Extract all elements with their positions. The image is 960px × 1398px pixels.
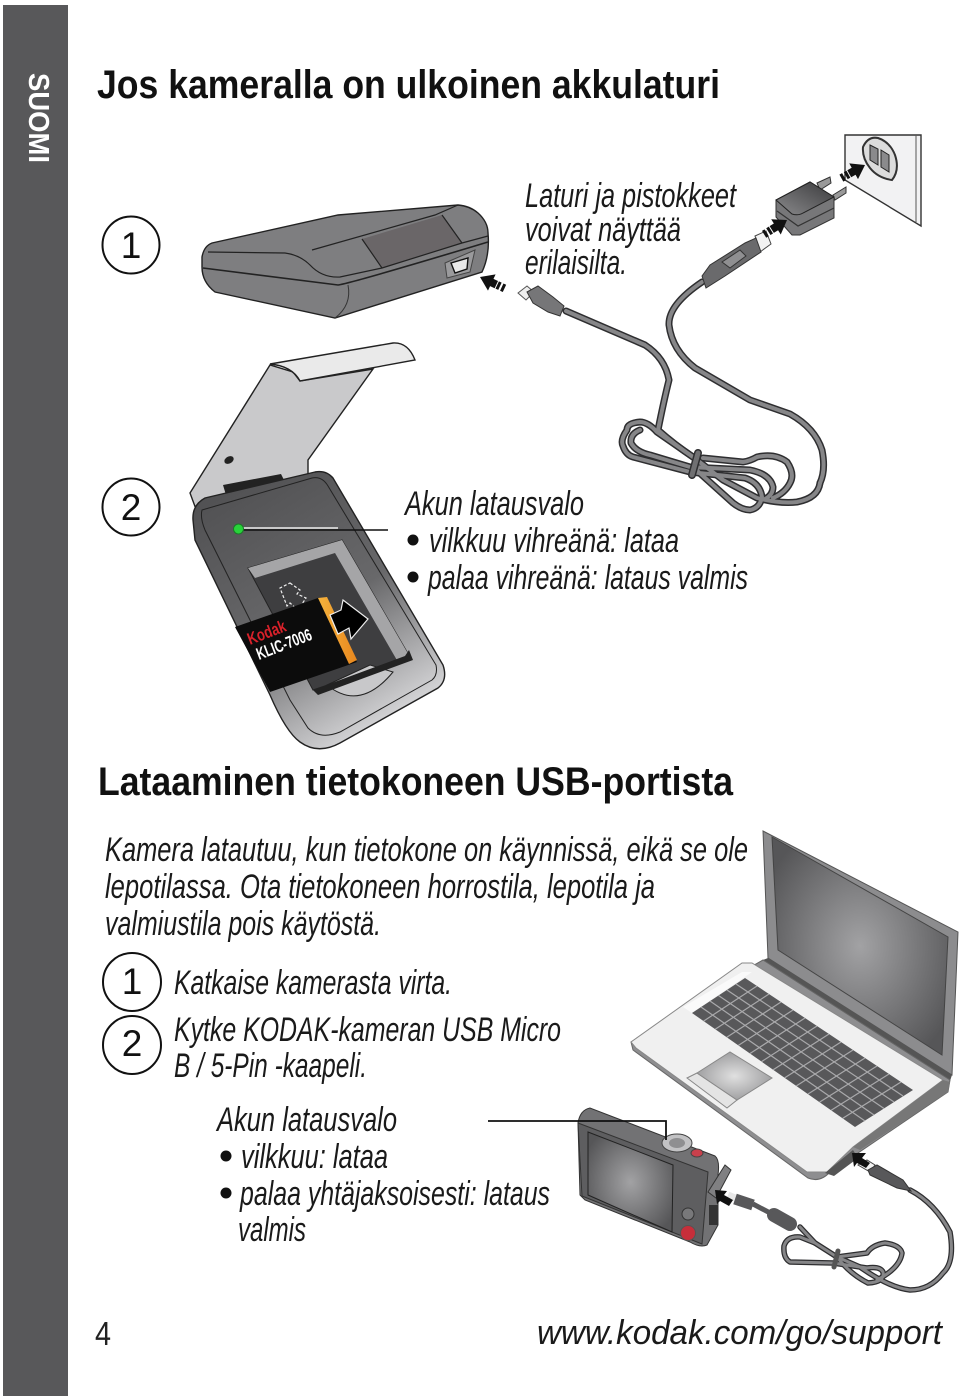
text: charger light states (404, 485, 748, 597)
text: camera light states (216, 1101, 550, 1249)
step number 1 (102, 216, 160, 274)
text: chargers may look different: Laturi ja pistokkeet (525, 177, 737, 215)
step 2: connect USB cable: Kytke KODAK-kameran USB Micro (174, 1011, 561, 1049)
step 2: connect USB cable (103, 1011, 561, 1085)
heading: external charger: Jos kameralla on ulkoinen akkulaturi (97, 63, 720, 107)
step 1: turn camera off: 1 (122, 961, 142, 1002)
illustration: charger cables and coil (566, 282, 824, 510)
illustration: charger open with battery (190, 343, 445, 749)
text: charger light states: palaa vihreänä: lataus valmis (427, 559, 748, 597)
text: USB charging intro: lepotilassa. Ota tietokoneen horrostila, lepotila ja (105, 868, 655, 906)
sidebar: language tab (3, 5, 68, 1396)
page number: 4 (95, 1315, 111, 1352)
text: chargers may look different (525, 177, 737, 282)
heading: USB charging: Lataaminen tietokoneen USB-portista (98, 760, 734, 804)
sidebar: language tab: SUOMI (22, 73, 54, 163)
illustration: laptop (631, 831, 958, 1180)
text: charger light states: Akun latausvalo (404, 485, 584, 523)
illustration: USB plug (702, 231, 771, 288)
illustration: wall outlet (845, 135, 921, 226)
illustration: USB cable to computer (728, 1190, 951, 1290)
illustration: micro USB plug (518, 286, 564, 316)
step number 2: 2 (121, 487, 141, 528)
text: camera light states: valmis (238, 1211, 306, 1249)
step 1: turn camera off (103, 953, 452, 1011)
text: USB charging intro (105, 831, 748, 943)
illustration: charger open with battery: Kodak (245, 617, 289, 649)
text: camera light states: Akun latausvalo (216, 1101, 397, 1139)
footer: support URL: www.kodak.com/go/support (537, 1314, 944, 1352)
step 2: connect USB cable: 2 (122, 1023, 142, 1064)
step 1: turn camera off: Katkaise kamerasta virta. (174, 964, 452, 1002)
step number 1: 1 (121, 225, 141, 266)
illustration: charger open with battery: KLIC-7006 (254, 625, 315, 664)
text: USB charging intro: Kamera latautuu, kun tietokone on käynnissä, eikä se ole (105, 831, 748, 869)
text: camera light states: vilkkuu: lataa (241, 1138, 388, 1176)
arrow: USB into laptop (852, 1153, 870, 1168)
illustration: camera (578, 1108, 731, 1246)
step number 2 (102, 478, 160, 536)
step 2: connect USB cable: B / 5-Pin -kaapeli. (174, 1047, 367, 1085)
illustration: USB plug to laptop (858, 1160, 911, 1191)
arrow: into charger (476, 269, 508, 297)
callout: camera light (488, 1121, 666, 1140)
text: USB charging intro: valmiustila pois käytöstä. (105, 905, 381, 943)
arrow: USB into camera (715, 1190, 733, 1206)
text: chargers may look different: erilaisilta. (525, 244, 627, 282)
arrow: adapter to outlet (837, 157, 869, 186)
illustration: charger closed (202, 205, 488, 318)
callout: charger light (234, 524, 388, 534)
text: charger light states: vilkkuu vihreänä: lataa (429, 522, 679, 560)
text: camera light states: palaa yhtäjaksoisesti: lataus (239, 1175, 550, 1213)
arrow: USB to adapter (759, 212, 792, 242)
illustration: USB power adapter (776, 177, 846, 235)
text: chargers may look different: voivat näyttää (525, 211, 681, 249)
